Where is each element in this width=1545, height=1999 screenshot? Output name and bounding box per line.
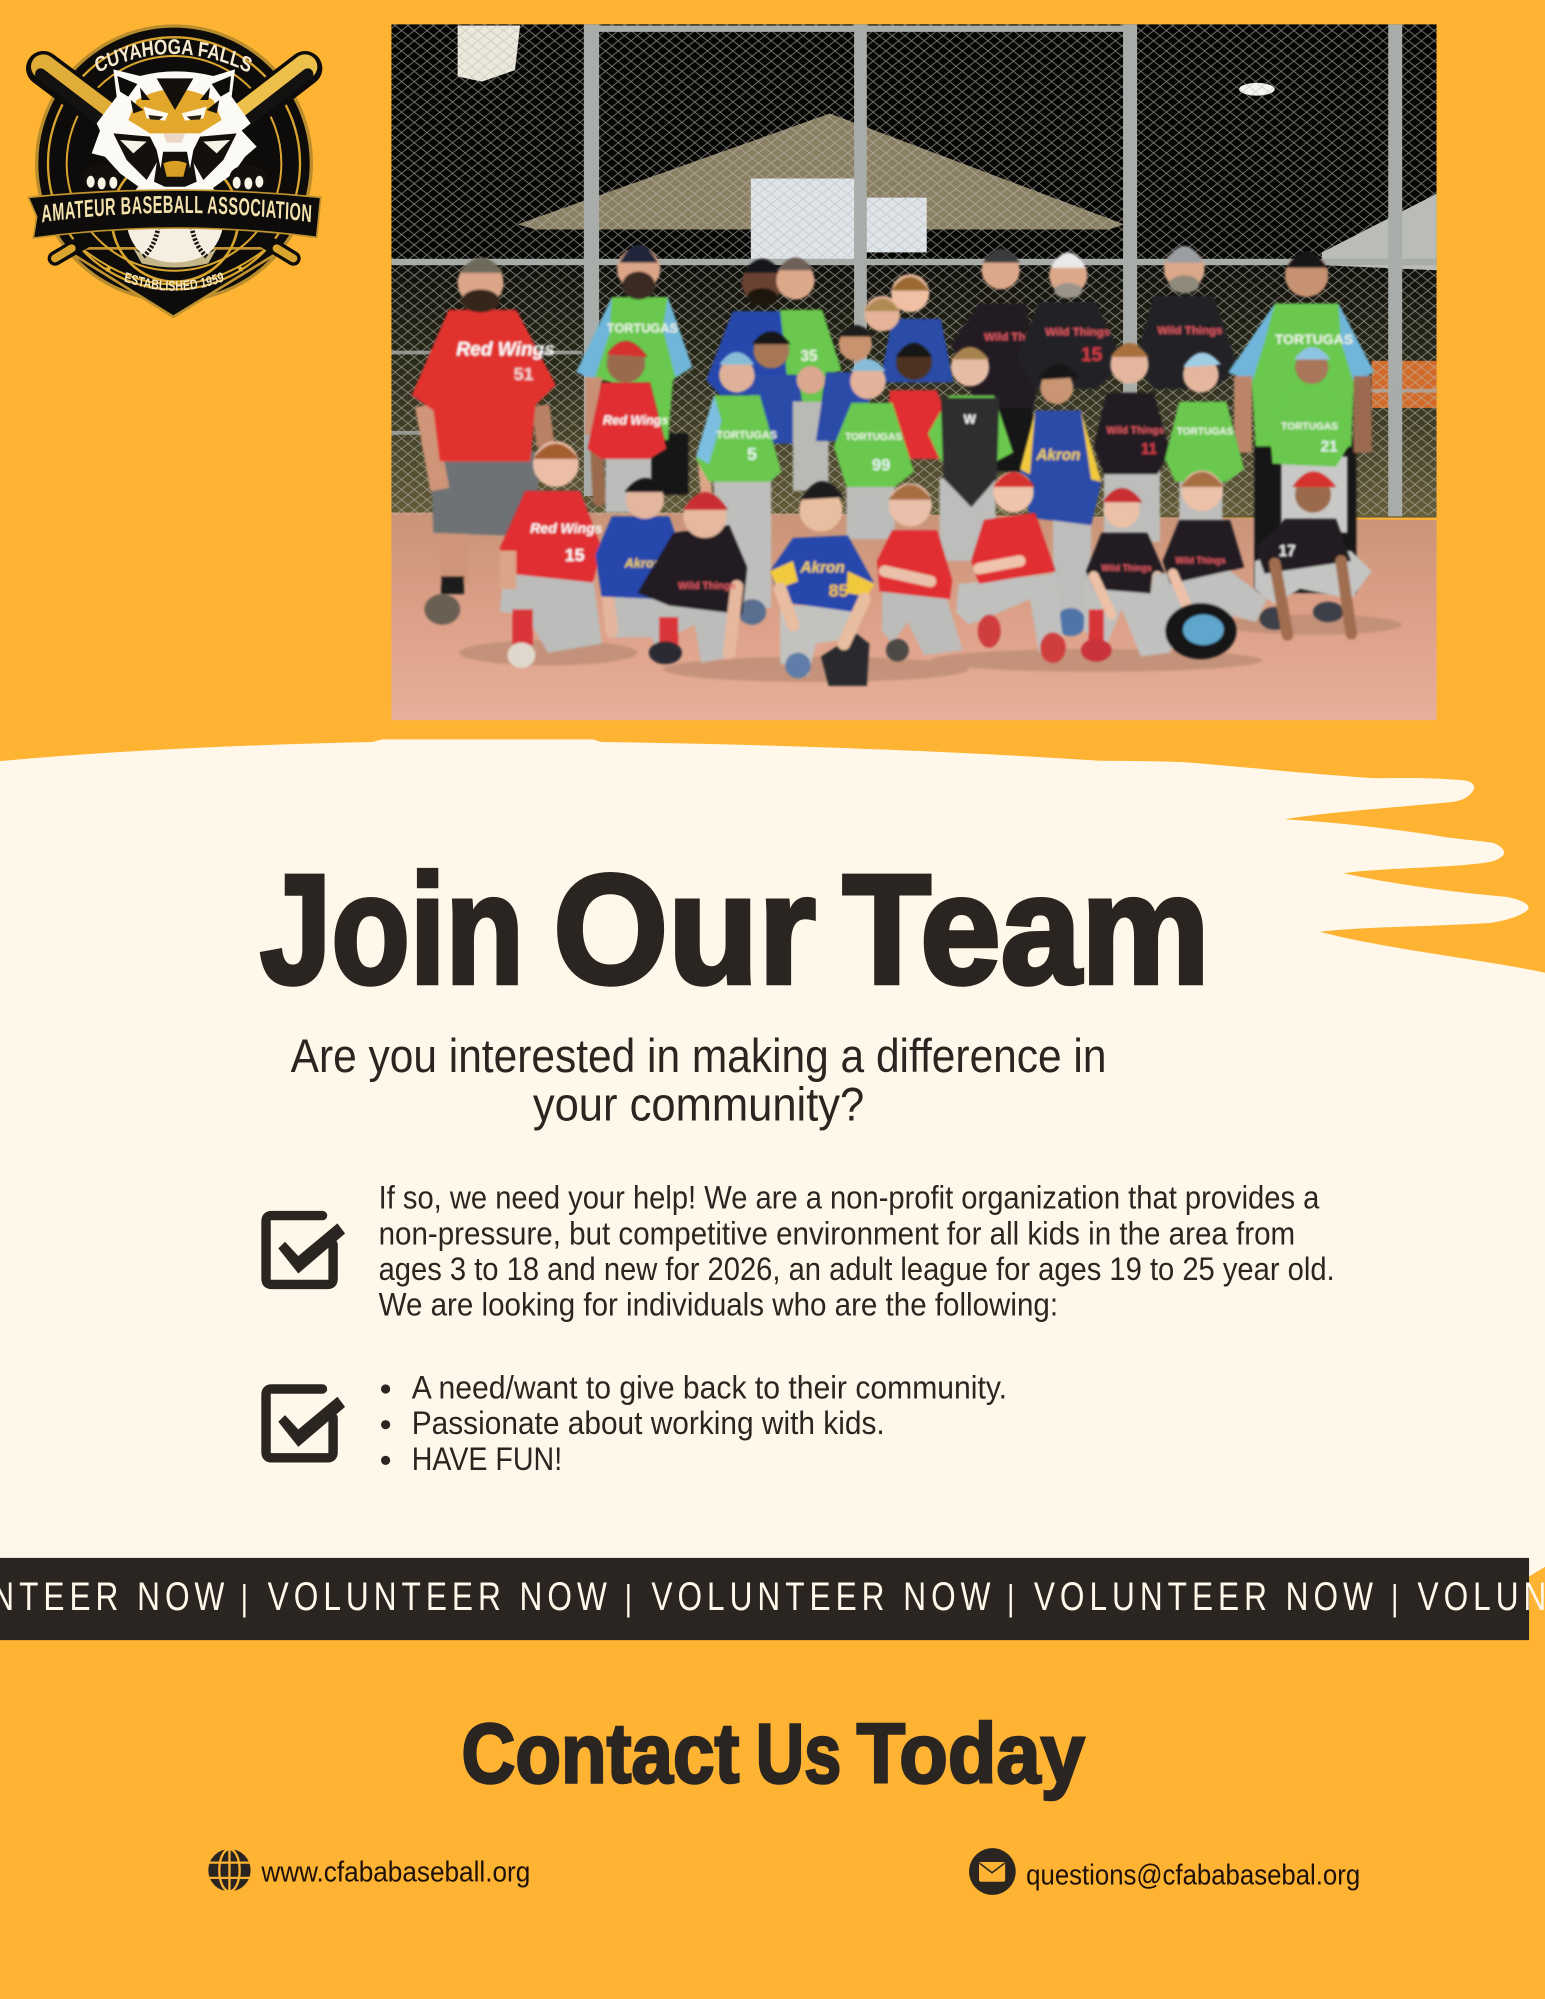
wild things kid: Wild Things <box>1106 425 1164 436</box>
title: Join Our Team <box>260 842 1210 1016</box>
green jersey kid number 5: TORTUGAS <box>716 430 777 442</box>
photo: night sky <box>391 24 1437 266</box>
photo: middle row of kids <box>588 325 1349 636</box>
icon: checkbox two <box>266 1389 345 1458</box>
subheading <box>291 1029 1106 1131</box>
ticker text: | <box>241 1578 248 1618</box>
icon: globe <box>208 1849 251 1892</box>
logo: stars <box>104 264 245 275</box>
Tortugas coach right: TORTUGAS <box>1275 331 1353 347</box>
logo: top arc text: CUYAHOGA FALLS <box>95 39 252 72</box>
logo: Cuyahoga Falls Amateur Baseball Association <box>26 24 322 318</box>
photo: fence posts and rails <box>391 24 1437 516</box>
kneeling akron kid with glove: Akron <box>800 559 845 576</box>
kneeling red kid <box>877 483 962 662</box>
intro paragraph <box>379 1180 1335 1323</box>
bullet list: A need/want to give back to their community. <box>412 1370 1007 1406</box>
bullet list: HAVE FUN! <box>412 1441 562 1477</box>
kneeling red wings kid: 15 <box>565 545 585 565</box>
green jersey kid number 99 <box>834 359 914 539</box>
photo: red wings coach: 51 <box>514 364 534 384</box>
title: Join Our Team: Our <box>553 842 816 1016</box>
heading: Contact Us Today: Today <box>857 1706 1085 1800</box>
blue jersey coach <box>705 257 788 397</box>
photo: scoreboard <box>751 178 927 261</box>
intro paragraph: If so, we need your help! We are a non-profit organization that provides a <box>379 1180 1320 1216</box>
icon: checkbox one <box>266 1216 345 1284</box>
logo: baseball <box>112 155 238 282</box>
logo: banner <box>28 190 321 238</box>
green jersey kid far right: TORTUGAS <box>1281 422 1338 433</box>
small boy behind <box>793 366 829 491</box>
logo: established text: ESTABLISHED 1959 <box>124 272 224 291</box>
Wild Things coach three: Wild Things <box>1157 325 1222 337</box>
intro paragraph: ages 3 to 18 and new for 2026, an adult league for ages 19 to 25 year old. <box>379 1251 1335 1287</box>
green jersey kid far right <box>1270 347 1349 533</box>
Tortugas coach: TORTUGAS <box>607 321 678 336</box>
photo: orange barrier <box>1372 361 1437 408</box>
title: Join Our Team: Team <box>843 842 1210 1016</box>
kneeling wild things kid: Wild Things <box>678 581 736 592</box>
wild things kid: 11 <box>1141 441 1158 458</box>
photo: stadium light <box>1239 83 1275 96</box>
blue jersey kid <box>816 325 874 441</box>
Tortugas coach <box>576 245 692 495</box>
black capped kid <box>750 331 808 444</box>
kneeling wild things kid two: Wild Things <box>1101 563 1152 573</box>
green jersey kid right <box>1165 352 1244 548</box>
green jersey kid right: TORTUGAS <box>1177 427 1234 438</box>
website: www.cfababaseball.org <box>260 1857 530 1889</box>
logo: shield base <box>37 26 311 317</box>
Wild Things coach two <box>1017 252 1124 389</box>
photo: pavilion roof <box>518 113 1124 229</box>
catcher kid <box>928 347 1013 561</box>
photo: front row kneeling kids <box>500 441 1372 686</box>
intro paragraph: We are looking for individuals who are the following: <box>379 1287 1058 1323</box>
title: Join Our Team: Join <box>260 842 524 1016</box>
ticker band <box>0 1558 1529 1640</box>
green jersey kid number 5 <box>696 352 781 625</box>
photo: red wings coach <box>412 258 556 625</box>
photo: red wings coach: Red Wings <box>456 340 555 361</box>
ticker text <box>0 1575 1545 1619</box>
photo: chain-link fence <box>391 24 1437 515</box>
green jersey kid number 99: TORTUGAS <box>845 432 902 443</box>
ticker text: | <box>1391 1578 1398 1618</box>
green jersey kid far right: 21 <box>1321 438 1338 455</box>
ticker text: VOLUNTEER NOW <box>651 1575 991 1619</box>
kneeling akron kid with glove <box>770 481 874 686</box>
kneeling red wings kid: Red Wings <box>530 520 603 536</box>
Wild Things coach one <box>951 249 1049 472</box>
black jersey kid on red <box>888 342 944 461</box>
orange footer panel <box>0 1567 1545 1999</box>
heading: Contact Us Today: Us <box>756 1706 841 1800</box>
logo: tiger head <box>92 69 257 197</box>
logo: banner text: AMATEUR BASEBALL ASSOCIATION <box>42 196 312 222</box>
bullet list <box>381 1370 1007 1477</box>
intro paragraph: non-pressure, but competitive environment for all kids in the area from <box>379 1215 1295 1251</box>
ticker text: | <box>1007 1578 1014 1618</box>
photo: ground shadows <box>459 614 1402 682</box>
green jersey coach with glasses <box>776 258 841 411</box>
Tortugas coach right <box>1229 251 1374 593</box>
logo: stars: ★ <box>236 264 245 275</box>
subheading: your community? <box>533 1078 864 1131</box>
kneeling number 17 kid <box>1254 472 1372 635</box>
bullet list: Passionate about working with kids. <box>412 1405 885 1441</box>
photo: back row coaches and players <box>576 245 1374 593</box>
kneeling akron kid: Akron <box>624 555 662 570</box>
red wings kid: Red Wings <box>603 413 669 428</box>
ticker text: VOLUNTEER NOW <box>1034 1575 1373 1619</box>
kneeling akron kid with glove: 85 <box>829 581 849 601</box>
catcher kid: W <box>964 411 976 426</box>
kneeling wild things kid <box>637 492 747 664</box>
akron girl: Akron <box>1035 447 1081 464</box>
logo: crossed bats <box>41 67 308 258</box>
green jersey kid number 5: 5 <box>747 444 757 464</box>
Wild Things coach three <box>1135 246 1239 389</box>
kneeling wild things kid two <box>1081 488 1170 662</box>
green jersey coach with glasses: 35 <box>801 348 818 365</box>
team photo <box>391 24 1437 720</box>
subheading: Are you interested in making a difference in <box>291 1029 1106 1082</box>
photo: banner at top left <box>458 25 520 82</box>
batting helmet <box>1165 603 1237 659</box>
green jersey kid number 99: 99 <box>872 455 890 474</box>
women in blue <box>864 274 954 382</box>
kneeling red capped kid <box>956 472 1066 663</box>
kneeling red wings kid <box>500 441 603 668</box>
Wild Things coach two: Wild Things <box>1045 326 1110 338</box>
photo: dirt infield <box>391 512 1437 720</box>
kneeling akron kid <box>595 478 685 637</box>
heading: Contact Us Today: Contact <box>461 1706 739 1800</box>
akron girl <box>1020 364 1101 636</box>
kneeling wild things kid three <box>1145 470 1267 650</box>
red wings kid <box>588 341 669 512</box>
logo: tiger paws <box>83 165 267 189</box>
photo: lower field background <box>391 263 1437 518</box>
ticker text: VOLUNTEER NOW <box>268 1575 607 1619</box>
Wild Things coach two: 15 <box>1081 345 1103 366</box>
logo: stars: ★ <box>104 264 113 275</box>
photo: tent <box>1322 194 1437 270</box>
email address: questions@cfababasebal.org <box>1026 1859 1360 1891</box>
ticker text: | <box>625 1578 632 1618</box>
Wild Things coach one: Wild Things <box>984 331 1049 343</box>
kneeling wild things kid three: Wild Things <box>1175 555 1226 565</box>
heading: Contact Us Today <box>461 1706 1085 1800</box>
kneeling number 17 kid: 17 <box>1279 543 1296 560</box>
wild things kid <box>1094 343 1170 542</box>
cream brush panel <box>0 739 1545 1645</box>
icon: email envelope <box>969 1848 1016 1895</box>
